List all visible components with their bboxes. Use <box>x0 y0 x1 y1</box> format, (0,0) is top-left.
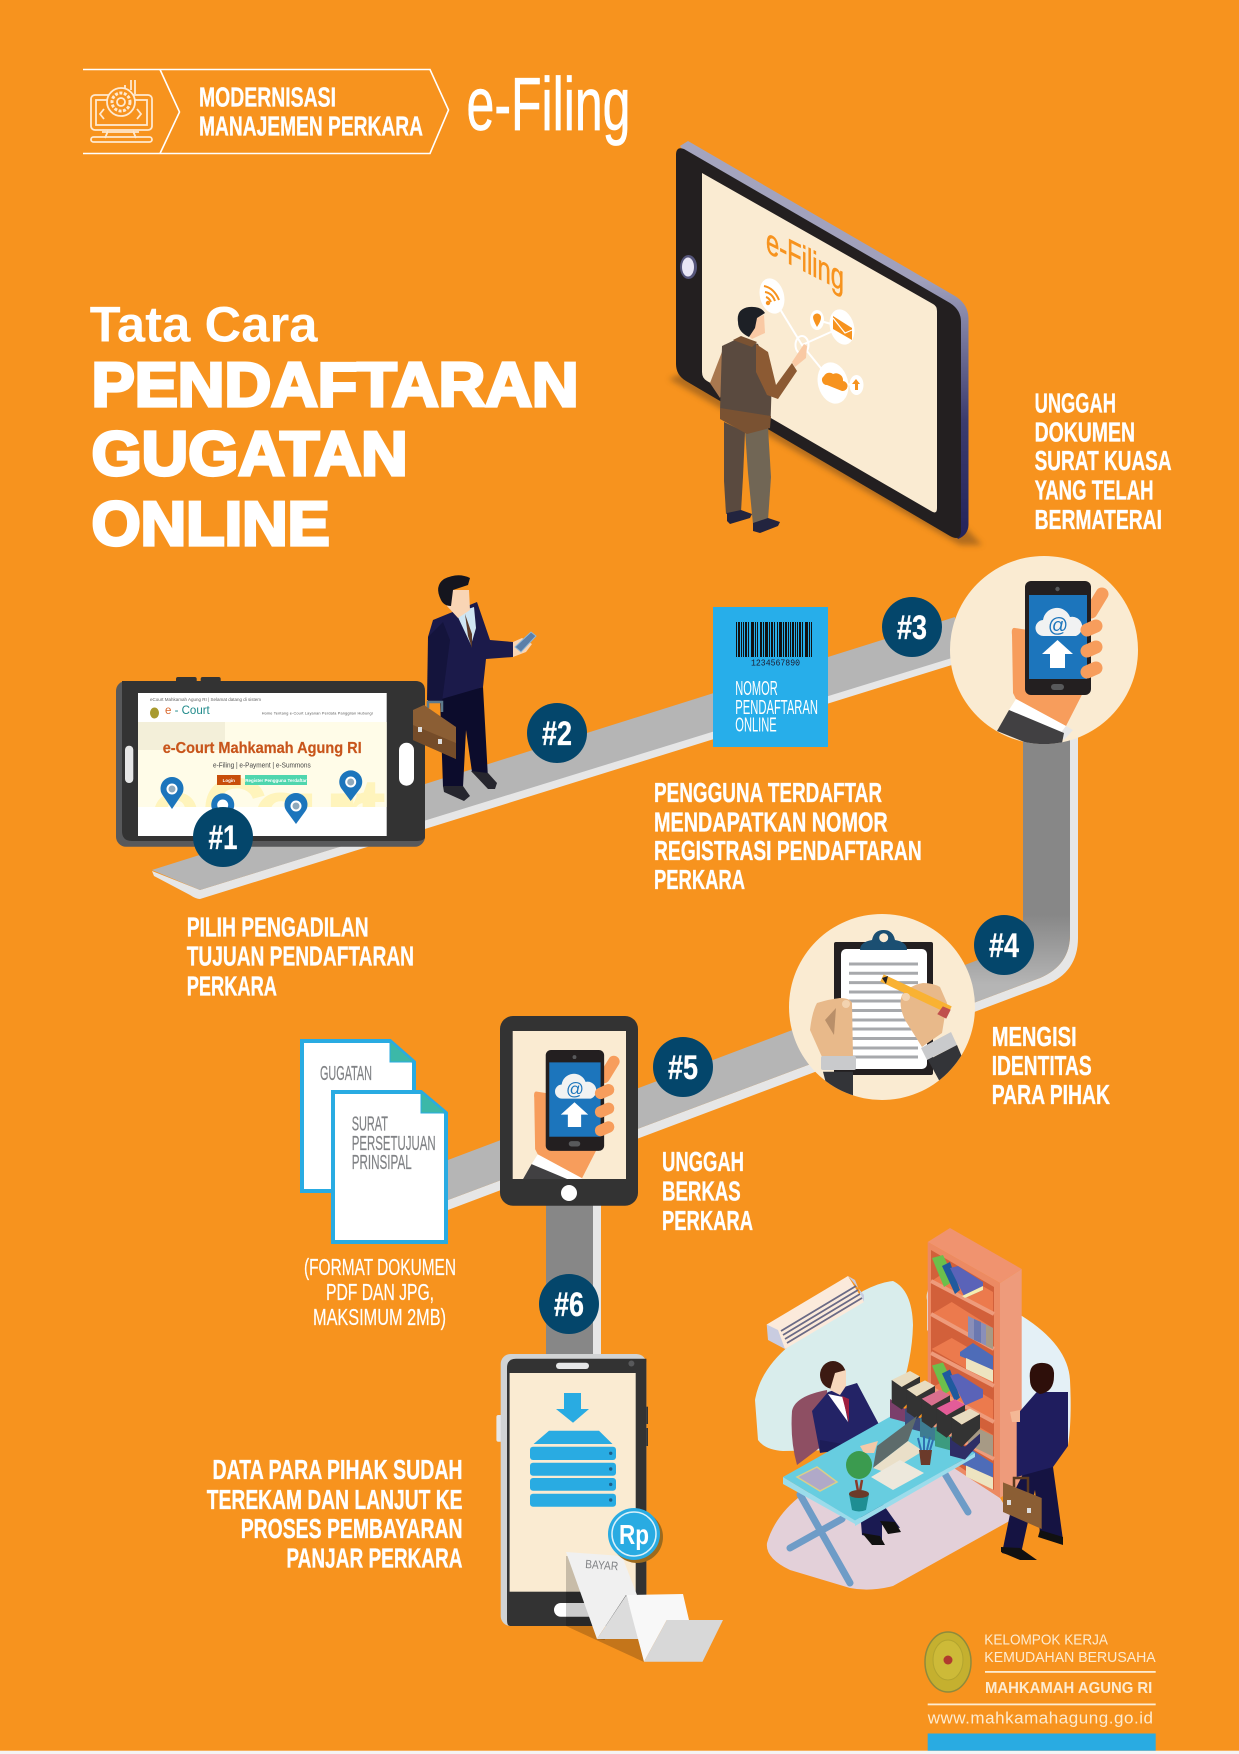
website screenshot: e - Court <box>165 705 211 717</box>
website screenshot: eCourt Mahkamah Agung RI | Selamat datang di sistem <box>150 697 261 702</box>
phone: step 6 server and payment <box>496 1354 723 1662</box>
document: surat persetujuan <box>333 1092 446 1242</box>
badge #1 <box>193 807 253 867</box>
label: format note: PDF DAN JPG, <box>326 1279 434 1305</box>
tablet: step 5 upload: @ <box>566 1079 584 1099</box>
desk <box>783 1415 975 1583</box>
title: PENDAFTARAN <box>92 351 579 420</box>
label: step 6 text: TEREKAM DAN LANJUT KE <box>207 1484 462 1515</box>
label: step 2 text: MENDAPATKAN NOMOR <box>654 807 888 838</box>
website screenshot <box>138 693 387 836</box>
label: step 6 text: PANJAR PERKARA <box>286 1543 462 1574</box>
label: step 5 text: PERKARA <box>662 1205 753 1236</box>
circle: step 3 phone upload <box>950 556 1138 747</box>
label: step 5 text: UNGGAH <box>662 1146 744 1177</box>
floor blob <box>767 1467 1013 1590</box>
document: surat persetujuan: PRINSIPAL <box>352 1152 412 1174</box>
tablet camera <box>680 255 697 279</box>
website screenshot: e-Filing | e-Payment | e-Summons <box>213 761 311 770</box>
label: step 1 text <box>187 912 414 1002</box>
website screenshot: e-Court Mahkamah Agung RI <box>163 740 362 757</box>
pencil cup <box>918 1436 933 1465</box>
road: step 5 to 6 <box>546 1200 601 1360</box>
label: step 3 text: DOKUMEN <box>1035 416 1135 447</box>
document: gugatan: GUGATAN <box>320 1063 372 1085</box>
screen network icons <box>756 276 864 407</box>
circle: step 4 clipboard and hands <box>789 914 975 1100</box>
title: Tata Cara <box>90 297 319 353</box>
footer logo block <box>925 1631 1156 1751</box>
left hand <box>810 998 856 1097</box>
label: step 2 text <box>654 777 922 895</box>
banner text: MODERNISASI <box>199 82 336 113</box>
icon: rupiah coin: Rp <box>619 1519 649 1550</box>
laptop and papers <box>860 1416 924 1490</box>
barcode card: NOMOR <box>735 678 778 700</box>
label: format note: (FORMAT DOKUMEN <box>304 1254 456 1280</box>
badge #5: #5 <box>668 1049 698 1087</box>
header banner <box>83 70 448 154</box>
right hand with pencil <box>882 976 962 1082</box>
badge #5 <box>653 1037 713 1097</box>
label: step 3 text <box>1035 387 1172 535</box>
briefcase <box>413 702 456 759</box>
barcode card: PENDAFTARAN <box>735 697 818 719</box>
badge #1: #1 <box>208 819 238 857</box>
documents <box>302 1041 446 1242</box>
receipt <box>566 1552 723 1662</box>
location pins <box>160 770 362 825</box>
barcode card <box>713 607 828 747</box>
tablet screen <box>702 173 937 512</box>
icon: computer with gear <box>91 80 152 142</box>
label: step 2 text: REGISTRASI PENDAFTARAN <box>654 835 922 866</box>
binders <box>890 1371 980 1460</box>
label: step 5 text: BERKAS <box>662 1176 741 1207</box>
clipboard <box>834 930 933 1075</box>
receipt: BAYAR <box>585 1557 619 1573</box>
briefcase <box>1003 1478 1042 1529</box>
seated man <box>812 1361 901 1545</box>
wall blob left <box>755 1281 913 1451</box>
label: step 6 text: PROSES PEMBAYARAN <box>241 1513 462 1544</box>
footer blue bar <box>928 1734 1156 1751</box>
website screenshot: Register Pengguna Terdaftar <box>245 778 307 783</box>
label: step 4 text: MENGISI <box>992 1021 1077 1052</box>
icon: server stack <box>530 1431 616 1507</box>
icon: download arrow <box>556 1393 589 1423</box>
bookshelf <box>928 1228 1022 1498</box>
badge #4 <box>974 915 1034 975</box>
label: step 1 text: PERKARA <box>187 971 277 1002</box>
man in brown jacket <box>710 307 807 533</box>
footer logo block: KEMUDAHAN BERUSAHA <box>984 1649 1156 1666</box>
label: step 4 text: IDENTITAS <box>992 1050 1092 1081</box>
icon: rupiah coin <box>608 1508 663 1563</box>
label: step 3 text: UNGGAH <box>1035 387 1116 418</box>
emblem <box>925 1632 971 1692</box>
label: step 5 text <box>662 1146 753 1236</box>
label: step 4 text: PARA PIHAK <box>992 1079 1110 1110</box>
website screenshot: Login <box>223 778 235 783</box>
barcode card: ONLINE <box>735 715 777 737</box>
label: step 3 text: BERMATERAI <box>1035 504 1162 535</box>
title: ONLINE <box>92 490 330 559</box>
footer logo block: MAHKAMAH AGUNG RI <box>985 1680 1152 1697</box>
businessman with briefcase <box>413 575 536 801</box>
badge #3: #3 <box>897 609 927 647</box>
road: step 1 to 3 <box>152 617 955 899</box>
label: step 6 text: DATA PARA PIHAK SUDAH <box>212 1454 462 1485</box>
heading: e-Filing: e-Filing <box>466 62 630 146</box>
tablet on desk <box>797 1467 837 1491</box>
screen text e-Filing: e-Filing <box>766 220 844 300</box>
air conditioner <box>767 1276 864 1349</box>
barcode: 1234567890 <box>751 658 800 669</box>
step badges <box>193 597 1034 1334</box>
books <box>932 1255 993 1382</box>
badge #4: #4 <box>989 927 1019 965</box>
phone with e-Court website <box>116 677 425 862</box>
plant <box>846 1451 872 1512</box>
wall blob right <box>927 1280 1071 1445</box>
website screenshot: e-Court <box>150 760 386 862</box>
badge #2 <box>527 703 587 763</box>
tablet: step 5 upload <box>500 1016 638 1206</box>
document: surat persetujuan: SURAT <box>352 1114 388 1136</box>
standing man <box>1001 1363 1068 1560</box>
label: step 4 text <box>992 1021 1110 1110</box>
chair <box>792 1390 830 1465</box>
illustration: office scene <box>755 1228 1071 1590</box>
label: format note <box>304 1254 456 1330</box>
footer logo block: www.mahkamahagung.go.id <box>927 1708 1153 1728</box>
document: surat persetujuan: PERSETUJUAN <box>352 1133 436 1155</box>
website screenshot: Home Tentang e-Court Layanan Perdata Panggilan Hubungi <box>262 712 373 716</box>
banner text <box>199 82 423 142</box>
label: step 3 text: SURAT KUASA <box>1035 445 1172 476</box>
phone: @ <box>1048 615 1068 637</box>
badge #6 <box>539 1274 599 1334</box>
title <box>90 297 579 559</box>
footer logo block: KELOMPOK KERJA <box>984 1631 1108 1648</box>
label: format note: MAKSIMUM 2MB) <box>313 1304 446 1330</box>
label: step 3 text: YANG TELAH <box>1035 474 1154 505</box>
label: step 2 text: PENGGUNA TERDAFTAR <box>654 777 882 808</box>
label: step 1 text: TUJUAN PENDAFTARAN <box>187 941 414 972</box>
document: gugatan <box>302 1041 414 1191</box>
badge #2: #2 <box>542 715 572 753</box>
label: step 1 text: PILIH PENGADILAN <box>187 912 369 943</box>
title: GUGATAN <box>92 420 408 489</box>
badge #6: #6 <box>554 1286 584 1324</box>
illustration: big tablet with man <box>669 141 982 545</box>
banner text: MANAJEMEN PERKARA <box>199 111 423 142</box>
label: step 2 text: PERKARA <box>654 864 745 895</box>
badge #3 <box>882 597 942 657</box>
road: step 3 to 5 with bend <box>440 730 1078 1213</box>
label: step 6 text <box>207 1454 462 1574</box>
phone <box>1025 581 1091 695</box>
